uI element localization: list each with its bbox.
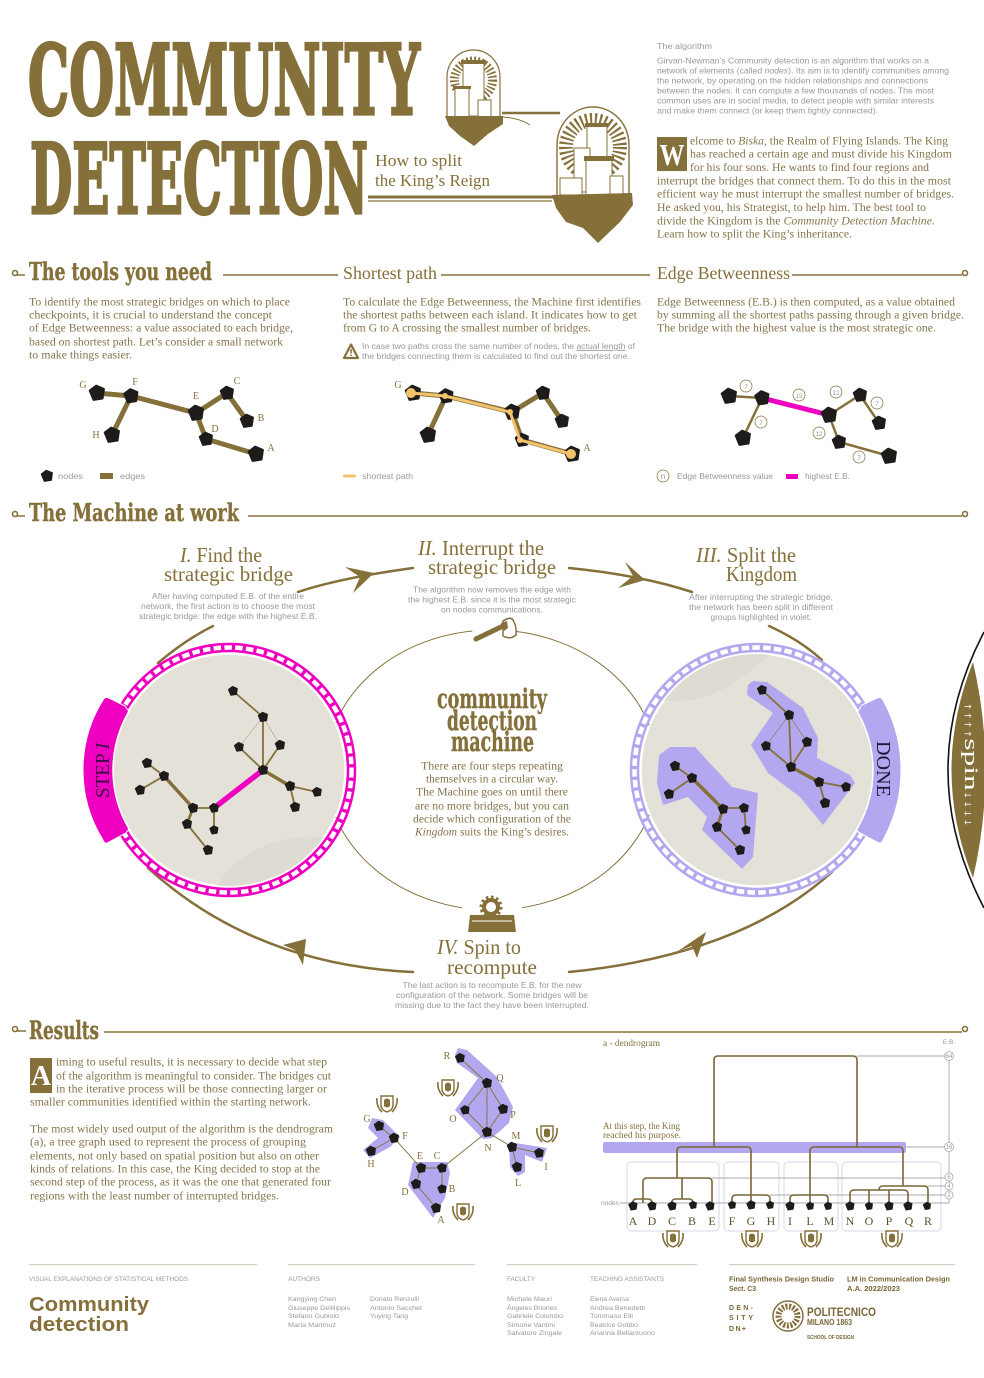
footer: authors: AUTHORS bbox=[288, 1276, 321, 1283]
text: shortest path intro: from G to A crossing the smallest number of bridges. bbox=[343, 320, 591, 334]
footer: faculty and teaching assistants: FACULTY bbox=[507, 1276, 536, 1283]
footer: faculty and teaching assistants: Elena Aversa bbox=[590, 1296, 629, 1303]
arrow: step IV to I bbox=[148, 868, 413, 972]
text: results body: elements, not only based on spatial position but also on other bbox=[30, 1148, 319, 1162]
text: the algorithm: the network, by operating on the hidden relationships and connections bbox=[657, 76, 928, 86]
footer: course info: LM in Communication Design bbox=[847, 1276, 950, 1284]
logo: politecnico: SCHOOL OF DESIGN bbox=[807, 1335, 854, 1341]
step II description bbox=[408, 584, 577, 614]
text: results intro bbox=[30, 1054, 332, 1108]
heading: edge betweenness bbox=[657, 263, 968, 283]
text: warning note: the bridges connecting them is calculated to find out the shortest one. bbox=[362, 351, 630, 361]
footer: course info: Sect. C3 bbox=[729, 1286, 756, 1293]
text: tools intro: based on shortest path. Let’s consider a small network bbox=[29, 334, 283, 348]
central cycle outline bbox=[326, 630, 658, 910]
chart: network with edge betweenness values: 12 bbox=[832, 390, 840, 397]
cut band bbox=[603, 1142, 906, 1153]
communities bbox=[657, 681, 855, 869]
spin wheel: ↑↑↑↑ spin ↓↓↓↓ bbox=[960, 702, 981, 827]
footer: faculty and teaching assistants: Salvatore Zingale bbox=[507, 1330, 562, 1337]
text: results intro: A bbox=[31, 1061, 52, 1092]
heading: edge betweenness: Edge Betweenness bbox=[657, 263, 790, 283]
chart: network with edge betweenness values: 15 bbox=[795, 393, 803, 400]
text: edge betweenness intro bbox=[657, 294, 964, 334]
step IV heading: recompute bbox=[447, 955, 537, 979]
text: results intro: of the algorithm is meaningful to consider. The bridges cut bbox=[56, 1068, 332, 1082]
leaf labels: O bbox=[865, 1214, 874, 1228]
text: welcome to Biska: has reached a certain age and must divide his Kingdom bbox=[690, 146, 953, 160]
logo: politecnico: POLITECNICO bbox=[807, 1307, 876, 1319]
machine title bbox=[437, 684, 548, 758]
footer: faculty and teaching assistants: Simone Vantini bbox=[507, 1322, 555, 1329]
step III heading bbox=[695, 543, 797, 586]
chart: network with edge betweenness values: 12 bbox=[815, 431, 823, 438]
step IV description: configuration of the network. Some bridges will be bbox=[396, 990, 588, 1000]
leaf labels: H bbox=[767, 1214, 776, 1228]
heading: the tools you need bbox=[12, 257, 212, 286]
footer: authors: Antonio Sacchet bbox=[370, 1305, 422, 1312]
leaf nodes bbox=[629, 1201, 930, 1210]
subtitle bbox=[375, 151, 490, 190]
footer: faculty and teaching assistants: Gabriele Colombo bbox=[507, 1313, 563, 1320]
text: tools intro: of Edge Betweenness: a value associated to each bridge, bbox=[29, 320, 293, 334]
footer: project title bbox=[29, 1264, 257, 1336]
arrow: step I to II bbox=[298, 567, 413, 593]
step III description bbox=[689, 592, 834, 622]
text: shortest path intro bbox=[343, 294, 641, 334]
text: results intro: in the iterative process will be those connecting larger or bbox=[56, 1082, 327, 1096]
chart: network with edge betweenness values: 7 bbox=[857, 455, 861, 462]
chart: dendrogram: a - dendrogram bbox=[603, 1038, 660, 1048]
chart: network with nodes and edges: A bbox=[267, 443, 275, 454]
text: results body: regions with the least number of interrupted bridges. bbox=[30, 1188, 279, 1202]
crests bbox=[663, 1231, 902, 1247]
text: welcome to Biska: W bbox=[660, 137, 684, 172]
value circles: 4 bbox=[947, 1184, 951, 1190]
legend: shortest path bbox=[343, 471, 413, 481]
value circles: 2 bbox=[947, 1193, 951, 1199]
leaf labels: D bbox=[648, 1214, 657, 1228]
text: tools intro: checkpoints, it is crucial to understand the concept bbox=[29, 308, 273, 322]
value circles: 6 bbox=[947, 1175, 951, 1181]
step I description: strategic bridge: the edge with the highest E.B. bbox=[139, 611, 317, 621]
panel: done disc: DONE bbox=[872, 741, 894, 797]
footer: project title: Community bbox=[29, 1294, 150, 1316]
legend: nodes and edges bbox=[42, 471, 145, 481]
footer: authors: Yuying Tang bbox=[370, 1313, 408, 1320]
chart: network with nodes and edges: D bbox=[211, 424, 219, 435]
text: the algorithm: common uses are in social media, to detect people with similar interests bbox=[657, 96, 934, 106]
step I description bbox=[139, 591, 317, 621]
subtitle: the King’s Reign bbox=[375, 171, 490, 190]
chart: final kingdom network: B bbox=[449, 1184, 456, 1195]
footer: authors bbox=[288, 1264, 475, 1329]
footer: authors: Stefano Gubiolo bbox=[288, 1313, 339, 1320]
chart: network with nodes and edges: B bbox=[258, 413, 265, 424]
chart: final kingdom network: L bbox=[515, 1178, 521, 1189]
chart: network with edge betweenness values: 7 bbox=[744, 384, 748, 391]
text: the algorithm: network of elements (called nodes). Its aim is to identify communities among bbox=[657, 66, 949, 76]
chart: network with nodes and edges: H bbox=[92, 430, 100, 441]
chart: final kingdom network: A bbox=[437, 1215, 445, 1226]
arrow stub out of step III disc bbox=[769, 626, 822, 660]
footer: authors: Donato Renzulli bbox=[370, 1296, 419, 1303]
value circles bbox=[944, 1052, 954, 1199]
heading: the machine at work: The Machine at work bbox=[29, 498, 240, 527]
logo: politecnico bbox=[773, 1301, 876, 1341]
leaf labels: F bbox=[729, 1214, 736, 1228]
value guides bbox=[620, 1056, 949, 1203]
legend: edge betweenness bbox=[657, 470, 850, 482]
step III heading: III. Split the bbox=[695, 543, 796, 567]
step III description: the network has been split in different bbox=[689, 602, 834, 612]
step IV description bbox=[395, 980, 589, 1010]
text: welcome to Biska: He asked you, his Strategist, to help him. The best tool to bbox=[657, 200, 926, 214]
chart: final kingdom network bbox=[363, 1048, 557, 1226]
chart: dendrogram: nodes bbox=[601, 1200, 620, 1207]
machine description: decide which configuration of the bbox=[413, 812, 571, 826]
footer: course info: A.A. 2022/2023 bbox=[847, 1286, 900, 1293]
step I heading: strategic bridge bbox=[164, 562, 293, 586]
text: shortest path intro: To calculate the Edge Betweenness, the Machine first identifies bbox=[343, 294, 641, 308]
leaf labels: N bbox=[846, 1214, 855, 1228]
title: DETECTION bbox=[30, 123, 368, 236]
tree bbox=[633, 1056, 928, 1203]
leaf labels: I bbox=[788, 1214, 792, 1228]
chart: final kingdom network: G bbox=[363, 1114, 371, 1125]
title: COMMUNITY bbox=[28, 24, 421, 137]
chart: dendrogram: E.B. bbox=[943, 1039, 955, 1046]
group boxes bbox=[627, 1162, 941, 1231]
step IV heading bbox=[436, 935, 537, 979]
machine description: Kingdom suits the King’s desires. bbox=[414, 824, 569, 838]
footer: authors: Kangying Chen bbox=[288, 1296, 336, 1303]
footer: faculty and teaching assistants: Andrea Benedetti bbox=[590, 1305, 645, 1312]
leaf labels: Q bbox=[905, 1214, 914, 1228]
band caption: At this step, the King bbox=[603, 1122, 680, 1132]
footer: course info: Final Synthesis Design Studio bbox=[729, 1276, 834, 1284]
step I heading: I. Find the bbox=[179, 543, 262, 567]
leaf labels: L bbox=[806, 1214, 814, 1228]
step II heading: II. Interrupt the bbox=[417, 536, 544, 560]
leaf labels: G bbox=[747, 1214, 756, 1228]
heading: results: Results bbox=[29, 1016, 99, 1045]
chart: network with nodes and edges bbox=[79, 376, 275, 461]
subtitle: How to split bbox=[375, 151, 462, 170]
text: results body: The most widely used output of the algorithm is the dendrogram bbox=[30, 1122, 334, 1136]
footer: course info bbox=[729, 1264, 955, 1293]
text: welcome to Biska bbox=[657, 134, 954, 240]
chart: network with edge betweenness values: 7 bbox=[759, 420, 763, 427]
arrow: step III to IV bbox=[569, 872, 832, 972]
icon: warning bbox=[344, 344, 358, 358]
leaf labels: R bbox=[924, 1214, 932, 1228]
step I heading bbox=[164, 543, 293, 586]
chart: network with nodes and edges: F bbox=[132, 377, 138, 388]
network: first step bbox=[136, 687, 321, 854]
step IV description: The last action is to recompute E.B. for the new bbox=[402, 980, 582, 990]
text: the algorithm bbox=[657, 41, 949, 116]
chart: network with shortest path bbox=[394, 380, 591, 461]
leaf labels bbox=[629, 1214, 932, 1228]
chart: final kingdom network: H bbox=[367, 1159, 375, 1170]
machine title: community bbox=[437, 684, 548, 715]
step IV description: missing due to the fact they have been interrupted. bbox=[395, 1000, 589, 1010]
step II heading: strategic bridge bbox=[428, 555, 556, 579]
step II description: The algorithm now removes the edge with bbox=[413, 584, 571, 594]
chart: final kingdom network: D bbox=[401, 1187, 409, 1198]
network: split bbox=[664, 686, 850, 854]
machine description: themselves in a circular way. bbox=[426, 772, 558, 786]
chart: final kingdom network: F bbox=[402, 1131, 408, 1142]
arrow: step II to III bbox=[569, 562, 692, 592]
text: results body: (a), a tree graph used to represent the process of grouping bbox=[30, 1134, 306, 1148]
text: results body bbox=[30, 1122, 334, 1202]
spin wheel bbox=[948, 632, 984, 908]
machine title: detection bbox=[447, 706, 537, 737]
value circles: 16 bbox=[946, 1145, 953, 1151]
text: the algorithm: between the nodes. It can compute a few thousands of nodes. The most bbox=[657, 86, 935, 96]
legend: edge betweenness: Edge Betweenness value bbox=[677, 471, 773, 481]
step II description: on nodes communications. bbox=[441, 604, 543, 614]
footer: faculty and teaching assistants: TEACHING ASSISTANTS bbox=[590, 1276, 665, 1283]
text: warning note bbox=[362, 341, 636, 361]
icon: axe bbox=[472, 618, 516, 639]
step IV heading: IV. Spin to bbox=[436, 935, 521, 959]
footer: project title: detection bbox=[29, 1314, 129, 1336]
legend: nodes and edges: nodes bbox=[58, 471, 83, 481]
machine description: are no more bridges, but you can bbox=[415, 798, 569, 812]
text: edge betweenness intro: by summing all the shortest paths passing through a given bridge. bbox=[657, 308, 964, 322]
text: results intro: smaller communities identified within the starting network. bbox=[30, 1094, 311, 1108]
step III description: groups highlighted in violet. bbox=[710, 612, 812, 622]
footer: faculty and teaching assistants bbox=[507, 1264, 697, 1337]
text: shortest path intro: the shortest paths between each island. It indicates how to get bbox=[343, 308, 638, 322]
band caption: reached his purpose. bbox=[603, 1131, 681, 1141]
text: tools intro: to make things easier. bbox=[29, 348, 132, 362]
title bbox=[28, 24, 421, 236]
step I description: After having computed E.B. of the entire bbox=[152, 591, 304, 601]
logo: density design: DEN- bbox=[729, 1305, 754, 1312]
panel: done disc bbox=[634, 648, 901, 892]
text: tools intro: To identify the most strategic bridges on which to place bbox=[29, 294, 290, 308]
legend: shortest path: shortest path bbox=[362, 471, 413, 481]
footer: faculty and teaching assistants: Tommaso Elli bbox=[590, 1313, 633, 1320]
logo: politecnico: MILANO 1863 bbox=[807, 1318, 852, 1327]
text: edge betweenness intro: Edge Betweenness (E.B.) is then computed, as a value obtained bbox=[657, 294, 955, 308]
panel: step 1 disc bbox=[83, 648, 360, 900]
heading: results bbox=[12, 1016, 968, 1045]
text: welcome to Biska: for his four sons. He wants to find four regions and bbox=[690, 160, 929, 174]
footer: faculty and teaching assistants: Michele Mauri bbox=[507, 1296, 552, 1303]
illustration: small flying island castle bbox=[445, 50, 503, 146]
footer: authors: Maria Martinuz bbox=[288, 1322, 336, 1329]
leaf labels: E bbox=[708, 1214, 716, 1228]
leaf labels: P bbox=[886, 1214, 893, 1228]
chart: network with edge betweenness values: 7 bbox=[875, 401, 879, 408]
band caption bbox=[603, 1122, 681, 1141]
panel: step 1 disc: STEP I bbox=[92, 742, 114, 798]
step I description: network, the first action is to choose the most bbox=[141, 601, 316, 611]
chart: network with shortest path: A bbox=[583, 443, 591, 454]
text: results intro: iming to useful results, it is necessary to decide what step bbox=[56, 1054, 327, 1068]
logo: density design bbox=[729, 1305, 754, 1333]
text: edge betweenness intro: The bridge with the highest value is the most strategic one. bbox=[657, 320, 936, 334]
text: welcome to Biska: divide the Kingdom is the Community Detection Machine. bbox=[657, 214, 935, 228]
step III description: After interrupting the strategic bridge, bbox=[689, 592, 833, 602]
step III heading: Kingdom bbox=[726, 562, 797, 586]
icon: gear bbox=[462, 895, 522, 933]
text: welcome to Biska: Learn how to split the King’s inheritance. bbox=[657, 226, 852, 240]
chart: final kingdom network: Q bbox=[496, 1073, 504, 1084]
footer: project title: VISUAL EXPLANATIONS OF STATISTICAL METHODS bbox=[29, 1276, 189, 1283]
chart: final kingdom network: M bbox=[512, 1131, 521, 1142]
chart: final kingdom network: E bbox=[417, 1151, 423, 1162]
leaf labels: C bbox=[668, 1214, 676, 1228]
chart: final kingdom network: N bbox=[484, 1143, 492, 1154]
heading: the tools you need: The tools you need bbox=[29, 257, 212, 286]
leaf labels: A bbox=[629, 1214, 638, 1228]
footer: faculty and teaching assistants: Arianna Bellantuono bbox=[590, 1330, 655, 1337]
footer: faculty and teaching assistants: Beatrice Gobbo bbox=[590, 1322, 638, 1329]
chart: network with edge betweenness values bbox=[722, 380, 896, 463]
machine title: machine bbox=[451, 727, 534, 758]
text: welcome to Biska: efficient way he must interrupt the smallest number of bridges. bbox=[657, 186, 954, 200]
leaf labels: B bbox=[688, 1214, 696, 1228]
chart: final kingdom network: P bbox=[510, 1110, 516, 1121]
heading: shortest path: Shortest path bbox=[343, 263, 437, 283]
chart: network with nodes and edges: E bbox=[193, 391, 199, 402]
text: tools intro bbox=[29, 294, 293, 362]
machine description: There are four steps repeating bbox=[421, 758, 563, 772]
illustration: bridge between islands bbox=[368, 113, 560, 201]
machine description: The Machine goes on until there bbox=[416, 784, 568, 798]
chart: final kingdom network: O bbox=[449, 1114, 457, 1125]
legend: edge betweenness: n bbox=[661, 472, 665, 481]
legend: edge betweenness: highest E.B. bbox=[805, 471, 850, 481]
logo: density design: DN+ bbox=[729, 1326, 746, 1333]
footer: authors: Giuseppe Dellilippis bbox=[288, 1305, 351, 1312]
logo: density design: SITY bbox=[729, 1315, 753, 1322]
text: welcome to Biska: elcome to Biska, the Realm of Flying Islands. The King bbox=[690, 134, 948, 148]
step II heading bbox=[417, 536, 556, 579]
footer: faculty and teaching assistants: Ángeles Briones bbox=[507, 1303, 558, 1312]
text: welcome to Biska: interrupt the bridges that connect them. To do this in the most bbox=[657, 174, 952, 188]
text: warning note: In case two paths cross the same number of nodes, the actual length of bbox=[362, 341, 636, 351]
chart: dendrogram bbox=[601, 1038, 955, 1247]
chart: network with shortest path: G bbox=[394, 380, 402, 391]
chart: final kingdom network: R bbox=[444, 1051, 451, 1062]
value circles: 64 bbox=[946, 1054, 953, 1060]
illustration: large flying island castle bbox=[552, 107, 633, 243]
text: the algorithm: Girvan-Newman’s Community detection is an algorithm that works on a bbox=[657, 56, 929, 66]
chart: network with nodes and edges: C bbox=[234, 376, 241, 387]
legend: nodes and edges: edges bbox=[120, 471, 145, 481]
step II description: the highest E.B. since it is the most strategic bbox=[408, 594, 577, 604]
chart: final kingdom network: C bbox=[434, 1151, 441, 1162]
chart: network with nodes and edges: G bbox=[79, 380, 87, 391]
text: results body: kinds of relations. In this case, the King decided to stop at the bbox=[30, 1162, 320, 1176]
heading: the machine at work bbox=[12, 498, 968, 527]
text: results body: second step of the process, as it was the one that generated four bbox=[30, 1174, 331, 1188]
leaf labels: M bbox=[824, 1214, 835, 1228]
text: the algorithm: and make them connect (or keep them tightly connected). bbox=[657, 106, 878, 116]
chart: final kingdom network: I bbox=[544, 1162, 548, 1173]
machine description bbox=[413, 758, 571, 838]
text: the algorithm: The algorithm bbox=[657, 41, 712, 51]
arrow stub into step I disc bbox=[158, 626, 213, 663]
